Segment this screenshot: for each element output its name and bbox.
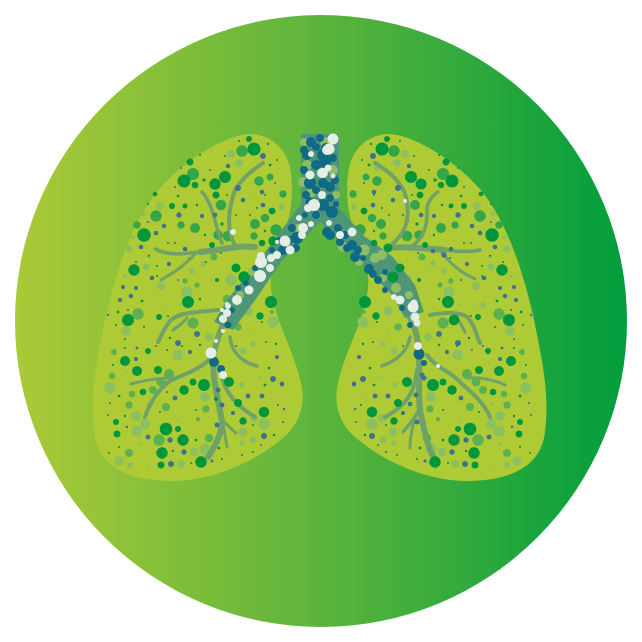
pale dots on trachea: [236, 137, 413, 299]
trachea and main bronchi: [214, 134, 424, 330]
airways, left lung: [131, 163, 263, 457]
right lung: [336, 134, 546, 481]
blue dots: [118, 153, 518, 467]
white dots on trachea and bronchi: [206, 134, 440, 379]
small speckle dots, left lung: [107, 140, 285, 467]
airways, right lung: [375, 163, 505, 458]
mid green dots: [109, 254, 527, 457]
pale dots: [104, 150, 532, 468]
left lung: [93, 134, 303, 481]
dark green dots over airways: [113, 136, 523, 468]
darker mid green dots: [133, 145, 503, 241]
small speckle dots, right lung: [354, 140, 532, 467]
teal dots on trachea: [209, 134, 427, 373]
